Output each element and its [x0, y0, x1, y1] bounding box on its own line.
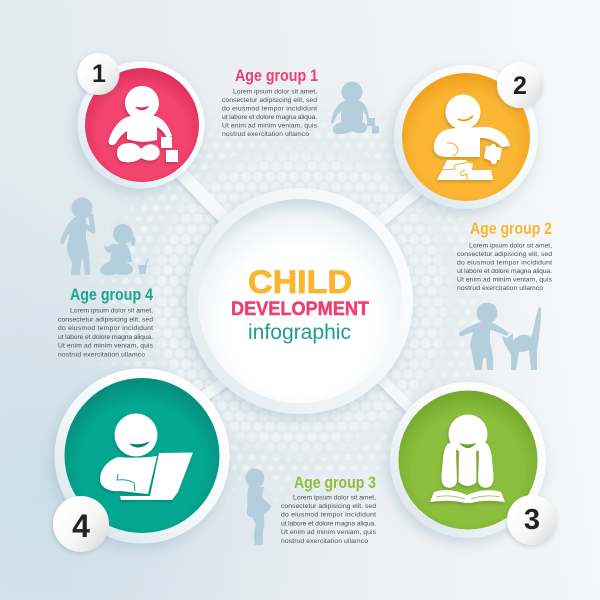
text block: age group 1: Ut enim ad minim veniam, quis: [222, 122, 318, 130]
badge 3: 3: [524, 504, 540, 536]
text block: age group 4: do eiusmod tempor incididunt: [58, 325, 153, 332]
icon: baby with blocks: [109, 86, 178, 162]
text block: age group 1: Age group 1: [235, 66, 318, 85]
text block: age group 2: do eiusmod tempor incididunt: [457, 260, 552, 266]
icon: smile and arm crease: [117, 442, 149, 491]
text block: age group 1: ut labore et dolore magna aliqua.: [222, 114, 317, 121]
icon: child with laptop: [100, 414, 193, 500]
text block: age group 2: Age group 2: [470, 219, 552, 238]
icon: smile 1: [136, 106, 148, 110]
badge 3: [507, 495, 557, 545]
icon: toddler silhouette: [459, 302, 509, 370]
text block: age group 4: ut labore et dolore magna aliqua.: [58, 334, 153, 341]
badge 1: [78, 53, 120, 95]
halftone dot pattern: [101, 136, 477, 490]
text block: age group 4: Lorem ipsum dolor sit amet,: [70, 308, 153, 314]
text block: age group 3: consectetur adipisicing elit, sed: [281, 503, 376, 510]
text block: age group 3: nostrud exercitation ullamco: [281, 538, 368, 545]
text block: age group 3: [281, 473, 377, 545]
text block: age group 1: Lorem ipsum dolor sit amet,: [233, 88, 317, 96]
badge 2: [497, 62, 543, 108]
badge 2: 2: [513, 72, 527, 100]
text block: age group 2: nostrud exercitation ullamco: [457, 285, 543, 292]
connector bars: [172, 164, 424, 416]
icon: child with puzzle: [434, 94, 510, 180]
icon: sitting baby silhouette: [331, 82, 379, 134]
ring 4: [54, 368, 230, 544]
text block: age group 1: [222, 66, 318, 138]
text block: age group 2: consectetur adipisicing elit, sed: [457, 251, 552, 258]
text block: age group 3: Lorem ipsum dolor sit amet,: [293, 494, 376, 502]
ring 2: [394, 65, 538, 209]
text block: age group 4: nostrud exercitation ullamco: [58, 352, 145, 358]
text block: age group 1: nostrud exercitation ullamco: [222, 131, 309, 138]
icon: side-view baby silhouette: [246, 468, 271, 545]
text block: age group 2: [457, 219, 553, 292]
panel: age group 1 circle: [78, 62, 204, 188]
disc 2: [402, 73, 530, 201]
panel: age group 3 circle: [390, 382, 546, 538]
icon: cup and spoon silhouette: [138, 259, 148, 274]
text block: age group 2: ut labore et dolore magna aliqua.: [457, 268, 552, 275]
badge 1: 1: [92, 60, 106, 88]
ring 1: [78, 62, 204, 188]
text block: age group 4: consectetur adipisicing elit, sed: [58, 316, 153, 323]
text block: age group 2: Lorem ipsum dolor sit amet,: [469, 242, 552, 250]
text block: age group 3: Age group 3: [294, 473, 376, 492]
text block: age group 4: Age group 4: [70, 285, 153, 304]
disc 1: [85, 68, 199, 182]
text block: age group 3: Ut enim ad minim veniam, quis: [281, 529, 377, 536]
badge 4: [53, 496, 109, 552]
icon: child reading: [430, 414, 505, 503]
badge 4: 4: [72, 508, 90, 544]
text block: age group 4: Ut enim ad minim veniam, quis: [58, 343, 154, 350]
panel: centre circle: [187, 188, 413, 414]
icon: cat silhouette: [502, 307, 541, 370]
text block: age group 1: do eiusmod tempor incididunt: [222, 106, 317, 112]
panel: age group 2 circle: [394, 65, 538, 209]
text block: age group 3: ut labore et dolore magna aliqua.: [281, 520, 376, 527]
ring 3: [390, 382, 546, 538]
icon: smile and book details: [436, 444, 500, 499]
text block: age group 2: Ut enim ad minim veniam, quis: [457, 276, 553, 284]
icon: puzzle details: [442, 116, 473, 180]
text block: age group 4: [58, 285, 154, 358]
title: DEVELOPMENT: [231, 298, 369, 320]
icon: sitting girl silhouette: [100, 224, 136, 275]
text block: age group 1: consectetur adipisicing elit, sed: [222, 97, 317, 104]
disc 4: [64, 378, 220, 533]
title: CHILD: [248, 264, 352, 300]
title: infographic: [248, 321, 351, 344]
centre inner disc: [198, 199, 402, 403]
disc 3: [398, 390, 538, 530]
title: [231, 264, 369, 344]
panel: age group 4 circle: [54, 368, 230, 544]
centre outer ring: [187, 188, 413, 414]
text block: age group 3: do eiusmod tempor incididunt: [281, 512, 376, 519]
icon: standing toddler silhouette: [60, 198, 93, 275]
